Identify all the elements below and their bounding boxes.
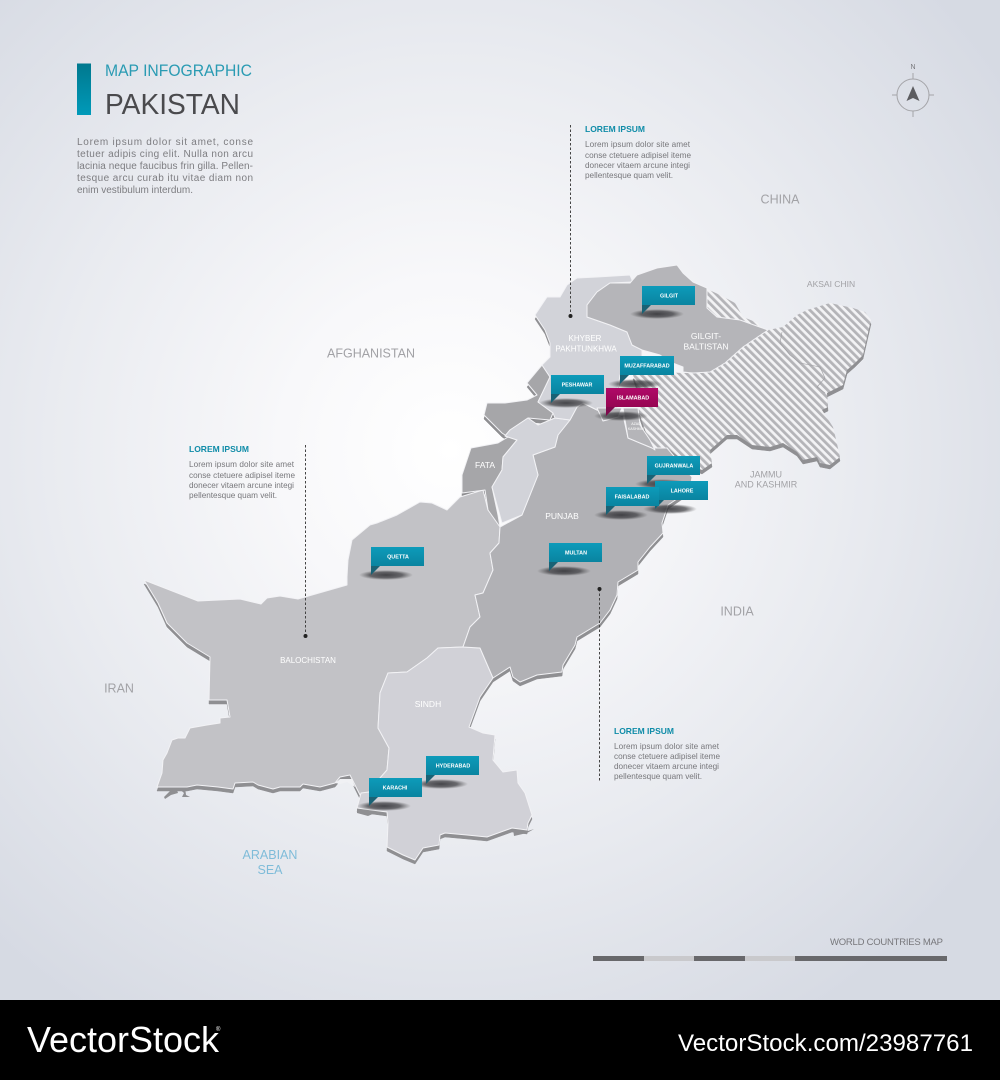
callout: top: pellentesque quam velit. — [585, 171, 673, 180]
flag: Hyderabad — [414, 756, 479, 789]
footer watermark band: ® — [216, 1026, 221, 1033]
region: Punjab — [463, 403, 692, 682]
flag: Faisalabad: FAISALABAD — [615, 494, 649, 500]
country labels: INDIA — [720, 604, 754, 618]
callout: right: LOREM IPSUM — [614, 726, 674, 736]
flag: Quetta — [359, 547, 424, 580]
flag: Gilgit — [630, 286, 695, 319]
callout: top — [568, 124, 691, 318]
region labels: BALOCHISTAN — [280, 656, 336, 665]
region labels: AZAD — [631, 422, 641, 426]
region: Jammu boundary line — [780, 332, 825, 393]
callout: left — [189, 444, 308, 638]
callout: top: donecer vitaem arcune integi — [585, 161, 690, 170]
region labels: PUNJAB — [545, 511, 579, 521]
country labels: IRAN — [104, 682, 134, 696]
coast islands and jagged shadow bits — [164, 519, 534, 836]
scale bar and caption — [593, 937, 947, 961]
subtitle: MAP INFOGRAPHIC — [105, 61, 252, 80]
map 3D extrusion — [144, 279, 871, 864]
flag: Multan: MULTAN — [565, 550, 587, 556]
flag: Islamabad: ISLAMABAD — [617, 396, 649, 402]
footer watermark band: VectorStock.com/23987761 — [678, 1030, 973, 1057]
region labels — [280, 331, 729, 709]
callout: right: donecer vitaem arcune integi — [614, 762, 719, 771]
flag: Peshawar: PESHAWAR — [562, 382, 593, 388]
region labels: BALTISTAN — [683, 342, 729, 352]
intro text block: tetuer adipis cing elit. Nulla non arcu — [77, 149, 253, 160]
flag: Gujranwala: GUJRANWALA — [655, 464, 693, 470]
icon: compass — [892, 64, 934, 117]
callout: top: LOREM IPSUM — [585, 124, 645, 134]
region: Khyber Pakhtunkhwa — [535, 275, 642, 420]
flag: Quetta: QUETTA — [387, 554, 409, 560]
country labels: CHINA — [761, 192, 800, 206]
sea label: SEA — [257, 863, 283, 877]
callout: right: Lorem ipsum dolor site amet — [614, 742, 720, 751]
sea label — [243, 848, 297, 877]
country labels: AND KASHMIR — [735, 480, 798, 490]
intro text block: tesque arcu curab itu vitae diam non — [77, 173, 253, 184]
flag: Karachi — [357, 778, 422, 811]
intro text block — [77, 137, 253, 196]
flag: Muzaffarabad: MUZAFFARABAD — [624, 364, 670, 370]
flag: Faisalabad — [594, 487, 659, 520]
region: Islamabad — [597, 408, 622, 421]
region labels: GILGIT- — [691, 331, 721, 341]
country labels: AKSAI CHIN — [807, 279, 855, 289]
flag: Islamabad — [594, 388, 658, 421]
callout: top: Lorem ipsum dolor site amet — [585, 140, 691, 149]
callout: left: LOREM IPSUM — [189, 444, 249, 454]
flag: Lahore: LAHORE — [671, 488, 694, 494]
scale bar and caption: WORLD COUNTRIES MAP — [830, 937, 943, 948]
region labels: KHYBER — [569, 334, 602, 343]
icon: compass: N — [910, 64, 916, 71]
region labels: SINDH — [415, 699, 441, 709]
flag: Karachi: KARACHI — [383, 786, 408, 792]
region labels: PAKHTUNKHWA — [555, 344, 617, 354]
header: title block — [77, 61, 252, 121]
region: FATA — [462, 365, 553, 527]
callout: top: conse ctetuere adipisel iteme — [585, 151, 691, 160]
sea label: ARABIAN — [243, 848, 297, 862]
flag: Peshawar — [539, 375, 604, 408]
region: Balochistan — [144, 490, 500, 795]
flag: Multan — [537, 543, 602, 576]
callout: left: donecer vitaem arcune integi — [189, 481, 294, 490]
intro text block: enim vestibulum interdum. — [77, 185, 193, 196]
flag: Gujranwala — [635, 456, 700, 489]
callout: right: conse ctetuere adipisel iteme — [614, 752, 720, 761]
country labels: AFGHANISTAN — [327, 346, 415, 360]
region: Kashmir hatched area — [633, 288, 871, 470]
region: Tribal light area — [492, 418, 570, 523]
footer watermark band — [0, 1000, 1000, 1080]
region: Gilgit-Baltistan — [587, 265, 768, 373]
flag: Hyderabad: HYDERABAD — [436, 764, 470, 770]
callout: right: pellentesque quam velit. — [614, 772, 702, 781]
callout: left: conse ctetuere adipisel iteme — [189, 471, 295, 480]
region: Sindh — [357, 647, 532, 860]
intro text block: lacinia neque faucibus frin gilla. Pellen- — [77, 161, 253, 172]
callout: left: pellentesque quam velit. — [189, 491, 277, 500]
intro text block: Lorem ipsum dolor sit amet, conse — [77, 137, 253, 148]
title accent bar — [77, 64, 91, 115]
flag: Gilgit: GILGIT — [660, 294, 679, 300]
map — [144, 265, 871, 860]
callout: right — [598, 587, 720, 781]
region: Azad Kashmir — [623, 408, 655, 450]
flag: Muzaffarabad — [608, 356, 674, 389]
country labels — [104, 192, 855, 696]
region labels: KASHMIR — [628, 427, 645, 431]
footer watermark band: VectorStock — [27, 1019, 220, 1060]
country labels: JAMMU — [750, 470, 782, 480]
callout: left: Lorem ipsum dolor site amet — [189, 460, 295, 469]
flag: Lahore — [643, 481, 708, 514]
region labels: FATA — [475, 460, 495, 470]
title: PAKISTAN — [105, 89, 240, 121]
